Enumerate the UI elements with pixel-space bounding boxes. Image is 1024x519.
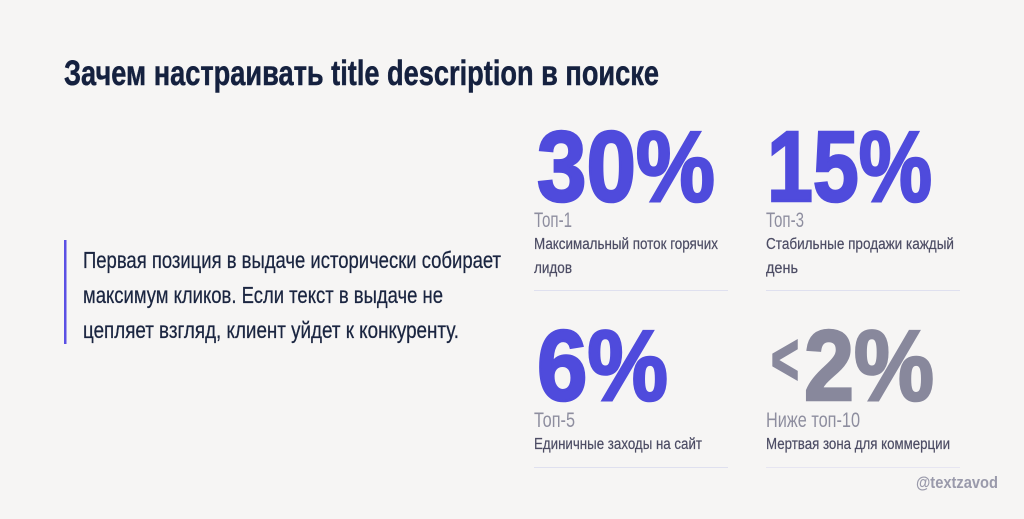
- description top 3: Стабильные продажи каждый: [766, 236, 954, 253]
- watermark: @textzavod: [916, 473, 998, 492]
- description top 5: Единичные заходы на сайт: [534, 436, 702, 453]
- stat: top 5: [534, 310, 728, 468]
- callout text: Первая позиция в выдаче исторически собирает: [83, 247, 501, 273]
- label top 5: Топ-5: [534, 409, 575, 432]
- description below top 10: Мертвая зона для коммерции: [766, 436, 950, 453]
- callout text: цепляет взгляд, клиент уйдет к конкуренту.: [83, 317, 459, 343]
- value 15%: 15%: [767, 111, 932, 223]
- title: Зачем настраивать title description в поиске: [64, 54, 659, 93]
- label below top 10: Ниже топ-10: [766, 409, 860, 432]
- description top 3: [766, 236, 954, 277]
- description top 3: день: [766, 260, 798, 277]
- description top 1: лидов: [534, 260, 572, 277]
- label top 1: Топ-1: [534, 209, 572, 232]
- callout accent bar: [64, 240, 66, 344]
- callout text: максимум кликов. Если текст в выдаче не: [83, 282, 443, 308]
- value under 2%: 2%: [804, 310, 934, 422]
- value 30%: 30%: [537, 111, 715, 223]
- stat: below top 10: [766, 310, 960, 468]
- value under 2%: <: [771, 320, 799, 400]
- description top 1: Максимальный поток горячих: [534, 236, 718, 253]
- stat: top 1: [534, 111, 728, 291]
- callout text: [83, 247, 501, 343]
- stat: top 3: [766, 111, 960, 291]
- value 6%: 6%: [537, 310, 668, 422]
- description top 1: [534, 236, 718, 277]
- label top 3: Топ-3: [766, 209, 804, 232]
- callout: first position: [64, 240, 501, 344]
